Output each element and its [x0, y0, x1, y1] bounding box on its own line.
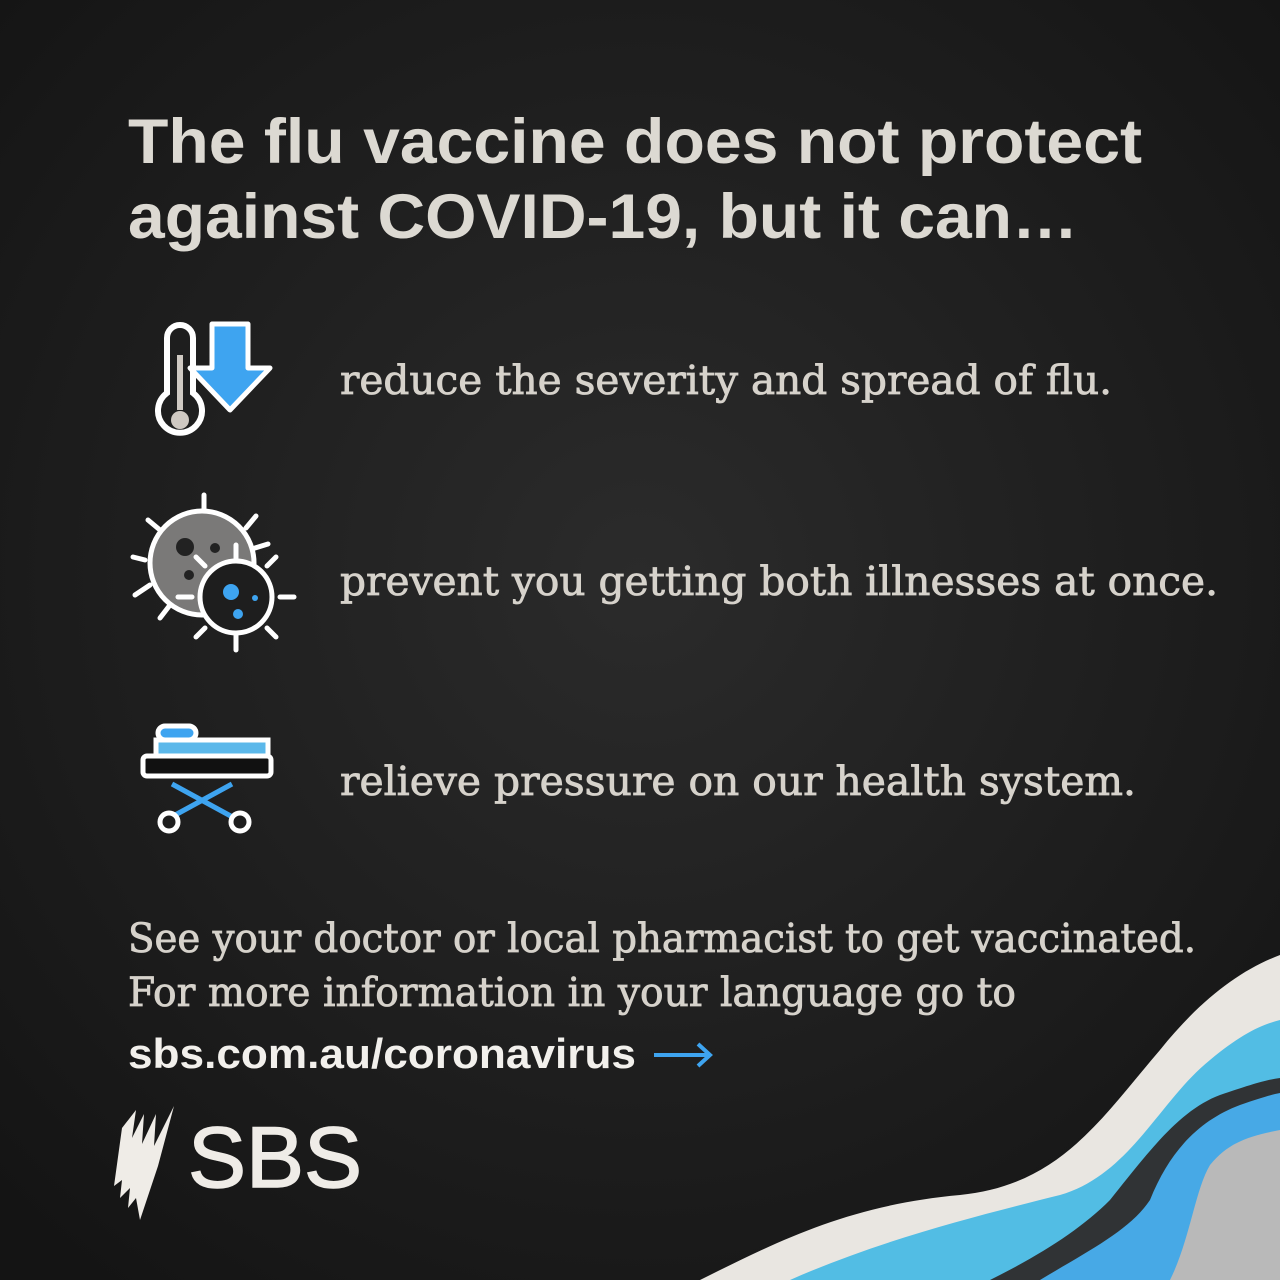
icon: hospital bed: [143, 726, 271, 831]
SBS logo: [114, 1106, 362, 1220]
text: relieve pressure: relieve pressure on our health system.: [340, 759, 1136, 805]
title: [128, 107, 1142, 252]
footer text: [128, 916, 1196, 1016]
SBS logo: SBS: [188, 1110, 362, 1206]
footer text: For more information in your language go to: [128, 970, 1016, 1016]
icon: thermometer with down arrow: [158, 324, 270, 433]
icon: two viruses: [133, 495, 294, 650]
title: against COVID-19, but it can…: [128, 182, 1078, 252]
footer text: See your doctor or local pharmacist to get vaccinated.: [128, 916, 1196, 962]
url link: sbs.com.au/coronavirus: [128, 1030, 636, 1077]
text: prevent both: prevent you getting both illnesses at once.: [340, 559, 1218, 605]
text: reduce severity: reduce the severity and spread of flu.: [340, 358, 1112, 404]
title: The flu vaccine does not protect: [128, 107, 1142, 177]
decorative wave layers: [700, 955, 1280, 1280]
